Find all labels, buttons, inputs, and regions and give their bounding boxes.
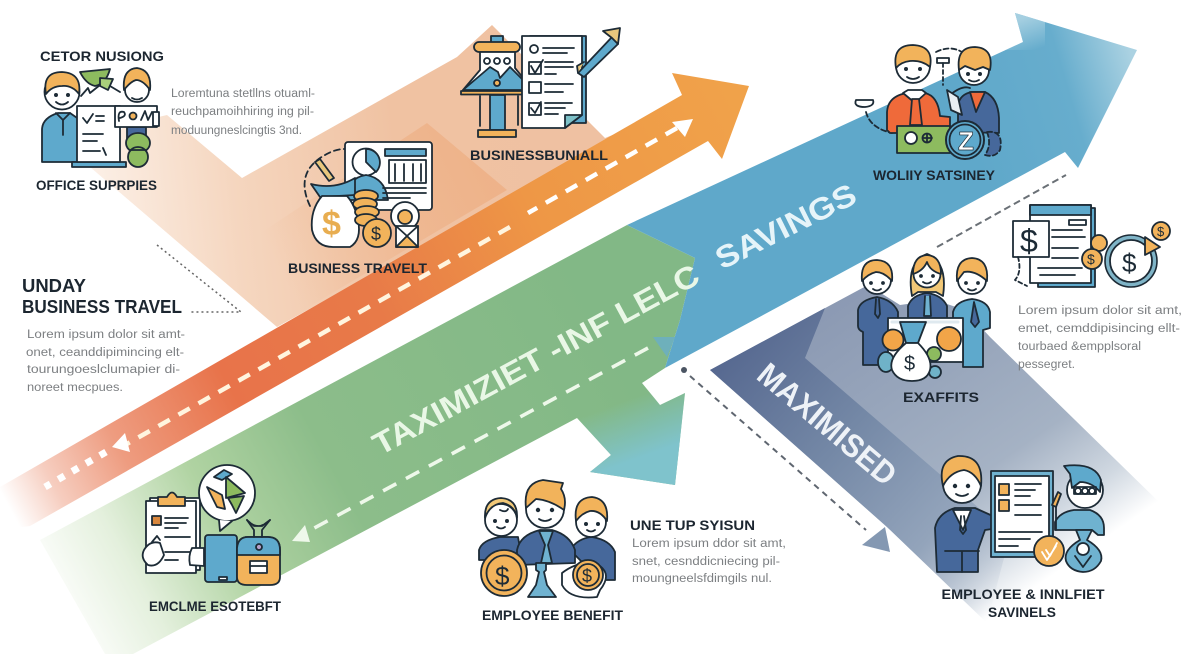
label: business travel: BUSINESS TRAVELT — [288, 260, 427, 276]
text block: employee benefit: snet, cesnddicniecing pil- — [632, 556, 780, 568]
label: wolly satsiney: WOLIIY SATSINEY — [873, 167, 996, 183]
heading: une tup sysun: UNE TUP SYISUN — [630, 517, 755, 533]
text block: document and savings: pessegret. — [1018, 359, 1075, 371]
heading: unday business travel: BUSINESS TRAVEL — [22, 297, 182, 317]
arrow: dashed connector to slate arrowhead — [681, 367, 890, 552]
icon: presenter with checklist — [935, 456, 1104, 572]
label: exaffits: EXAFFITS — [903, 389, 979, 405]
arrow: slate maximised band — [710, 285, 1160, 623]
text block: document and savings — [1018, 305, 1182, 371]
icon: podium and checklist — [461, 28, 620, 137]
icon: three employees with money bag: $ — [904, 353, 915, 375]
icon: two colleagues with cash and coin: Z — [958, 126, 974, 156]
icon: clipboard, speech bubble, tablet and bag — [143, 465, 280, 585]
text block: office supplies: moduungneslcingtis 3nd. — [171, 125, 302, 137]
text block: document and savings: Lorem ipsum dolor sit amt, — [1018, 305, 1182, 317]
label: business bunialt: BUSINESSBUNIALL — [470, 147, 608, 163]
icon: money bag, coins, report — [305, 142, 432, 247]
panel: employee benefit — [479, 480, 786, 623]
arrow: dashed line on green arrow — [292, 348, 648, 542]
main title: rotated savings headline: TAXIMIZIET -INF LELC — [367, 257, 705, 462]
label: emclme esotebft: EMCLME ESOTEBFT — [149, 598, 281, 614]
icon: employees with coins — [479, 480, 615, 598]
text block: employee benefit: moungneelsfdimgils nul. — [632, 573, 772, 585]
heading: unday business travel: UNDAY — [22, 276, 86, 296]
icon: statement, coins and clock: $ — [1157, 224, 1165, 239]
icon: statement, coins and clock: $ — [1122, 248, 1137, 278]
label: employee and innlfiet savinels: SAVINELS — [988, 604, 1056, 620]
panel: business travel callout — [22, 276, 185, 394]
panel: business podium checklist — [461, 28, 620, 163]
text block: employee benefit: Lorem ipsum ddor sit amt, — [632, 538, 786, 550]
panel: business travel icon — [288, 142, 432, 276]
panel: employee and innlfiet savinels — [935, 456, 1105, 620]
dotted connector: business travel — [157, 245, 241, 312]
dashed connector: upper right — [937, 175, 1066, 247]
heading: unday business travel — [22, 276, 182, 317]
text block: document and savings: emet, cemddipisincing ellt- — [1018, 323, 1180, 335]
arrow: blue savings arrow — [627, 13, 1137, 368]
text block: office supplies: reuchpamoihhiring ing pil- — [171, 106, 314, 118]
text block: document and savings: tourbaed &empplsoral — [1018, 341, 1141, 353]
main title: rotated savings headline — [367, 177, 862, 462]
panel: office supplies — [36, 48, 315, 193]
icon: money bag, coins, report: $ — [371, 224, 381, 244]
heading: cetor nusiong: CETOR NUSIONG — [40, 48, 164, 64]
text block: business travel: Lorem ipsum dolor sit amt- — [27, 329, 185, 341]
panel: document and savings clock — [1013, 205, 1182, 371]
arrow: green benefit arrow — [40, 225, 695, 654]
icon: office supplies — [42, 68, 159, 167]
label: office supplies: OFFICE SUPRPIES — [36, 177, 157, 193]
panel: exaffits — [858, 254, 990, 405]
icon: statement, coins and clock: $ — [1020, 223, 1038, 259]
rotated label: maximised: MAXIMISED — [751, 356, 904, 493]
icon: statement, coins and clock: $ — [1087, 251, 1095, 267]
icon: employees with coins: $ — [495, 561, 510, 591]
label: employee and innlfiet savinels: EMPLOYEE & INNLFIET — [942, 586, 1105, 602]
text block: business travel — [26, 329, 185, 394]
main title: rotated savings headline: SAVINGS — [710, 177, 862, 276]
icon: money bag, coins, report: $ — [322, 205, 341, 243]
arrow: red-orange travel arrow — [0, 73, 749, 530]
icon: employees with coins: $ — [582, 566, 592, 586]
text block: business travel: onet, ceanddipimincing elt- — [26, 347, 184, 359]
icon: statement, coins and clock — [1013, 205, 1170, 287]
icon: two colleagues with cash and coin — [855, 45, 1001, 159]
text block: employee benefit — [632, 538, 786, 585]
icon: three employees with money bag — [858, 254, 990, 381]
panel: wolly satsiney — [855, 45, 1001, 183]
text block: business travel: tourungoeslclumapier di- — [27, 364, 180, 376]
text block: business travel: noreet mecpues. — [27, 382, 123, 394]
panel: emclme esotebft — [143, 465, 281, 614]
label: employee benefit: EMPLOYEE BENEFIT — [482, 607, 623, 623]
arrow: dashed line on red arrow — [45, 119, 693, 487]
text block: office supplies: Loremtuna stetllns otuaml- — [171, 88, 315, 100]
text block: office supplies — [171, 88, 315, 137]
panel: peach backdrop — [90, 25, 650, 327]
label: employee and innlfiet savinels — [942, 586, 1105, 620]
